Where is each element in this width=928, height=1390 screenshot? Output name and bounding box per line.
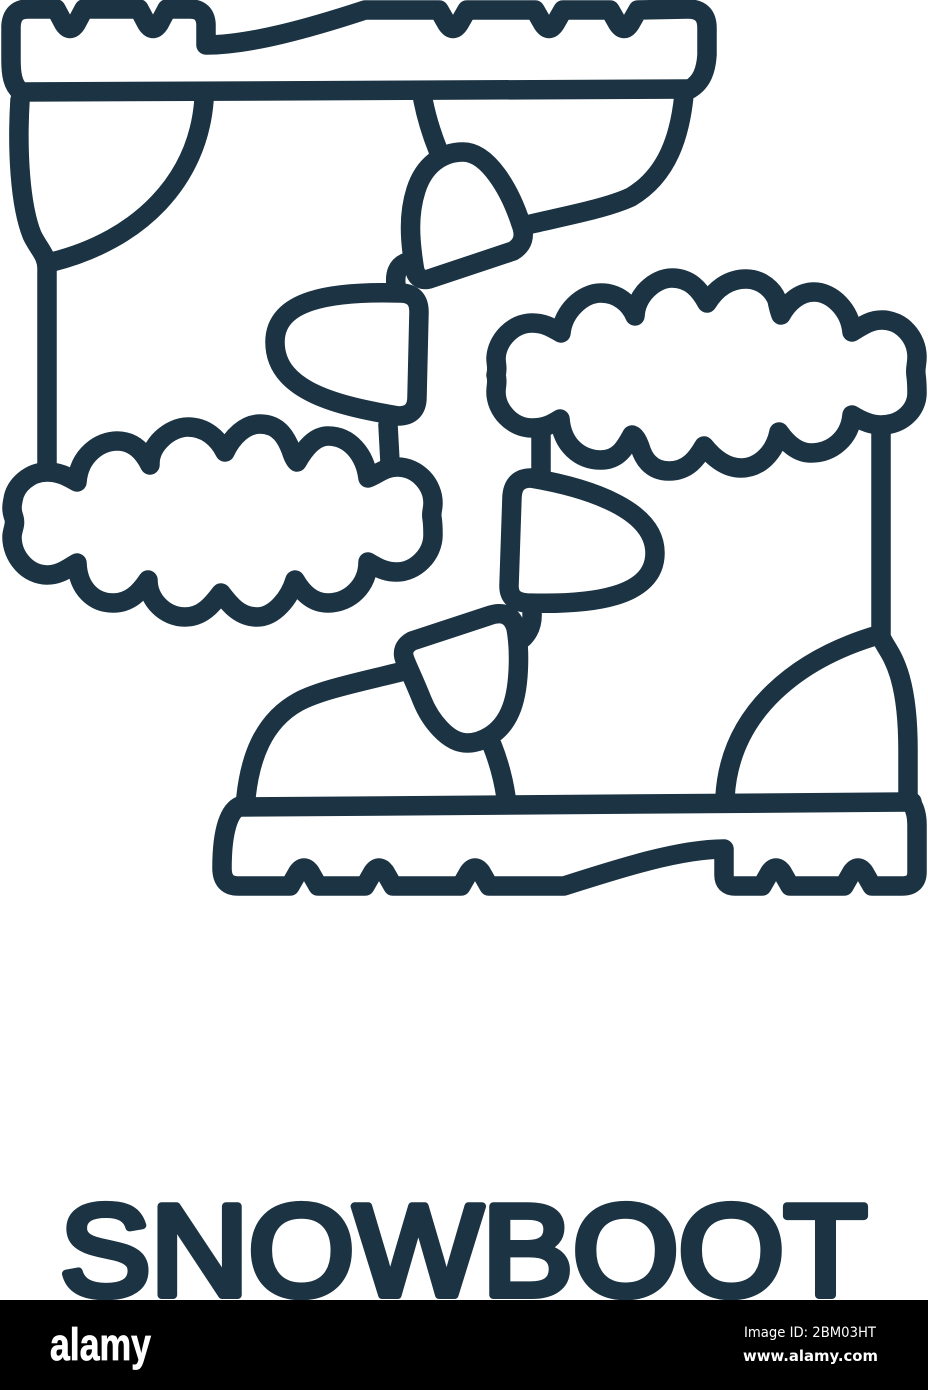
footer bar [0,1300,928,1390]
sole top line [240,802,912,807]
connector between buckles [396,263,405,285]
toe cap [527,95,684,225]
connector between buckles [523,612,532,638]
title: snowboot: SNOWBOOT [60,1179,867,1323]
image id: Image ID: 2BM03HT [744,1325,876,1341]
buckle two and strap [275,293,419,462]
back seam and heel counter [725,430,908,797]
buckle three [404,614,518,743]
icon: upside-down snow boot [11,9,707,617]
footer logo: alamy [50,1319,151,1370]
boot sole with lugs [11,9,707,91]
strap and buckle one [410,100,523,279]
fur cuff [12,424,433,617]
fur cuff [496,278,917,471]
icon: upright snow boot [222,278,917,886]
boot sole with lugs [222,804,917,886]
heel counter and back seam [19,100,204,464]
strap and toe cap [246,672,506,797]
website: www.alamy.com [743,1347,878,1365]
sole top line [20,89,690,92]
buckle four and strap [509,433,655,603]
